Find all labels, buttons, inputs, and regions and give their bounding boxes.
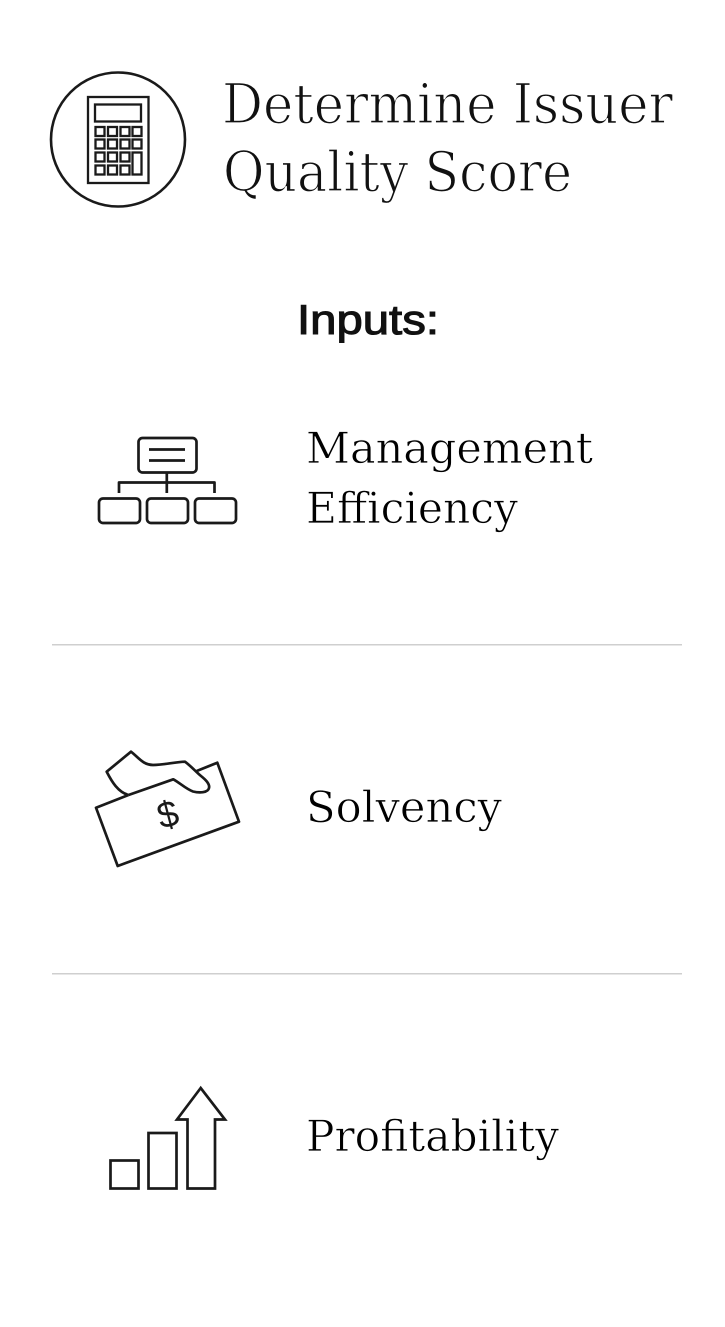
icon: hand holding dollar bill: $ <box>153 792 183 837</box>
icon: hand holding dollar bill <box>96 752 239 866</box>
icon: calculator in circle <box>51 72 185 206</box>
title: Determine Issuer <box>222 72 674 136</box>
label: management efficiency: Management <box>306 424 593 474</box>
label: management efficiency <box>306 424 593 534</box>
label: solvency: Solvency <box>306 783 503 833</box>
title: Quality Score <box>223 140 572 204</box>
label: management efficiency: Efficiency <box>306 484 519 534</box>
title <box>222 72 674 204</box>
icon: organization chart <box>99 438 236 523</box>
label: profitability: Profitability <box>306 1112 560 1162</box>
icon: rising bars with arrow <box>110 1088 225 1188</box>
heading: inputs: Inputs: <box>297 296 439 343</box>
